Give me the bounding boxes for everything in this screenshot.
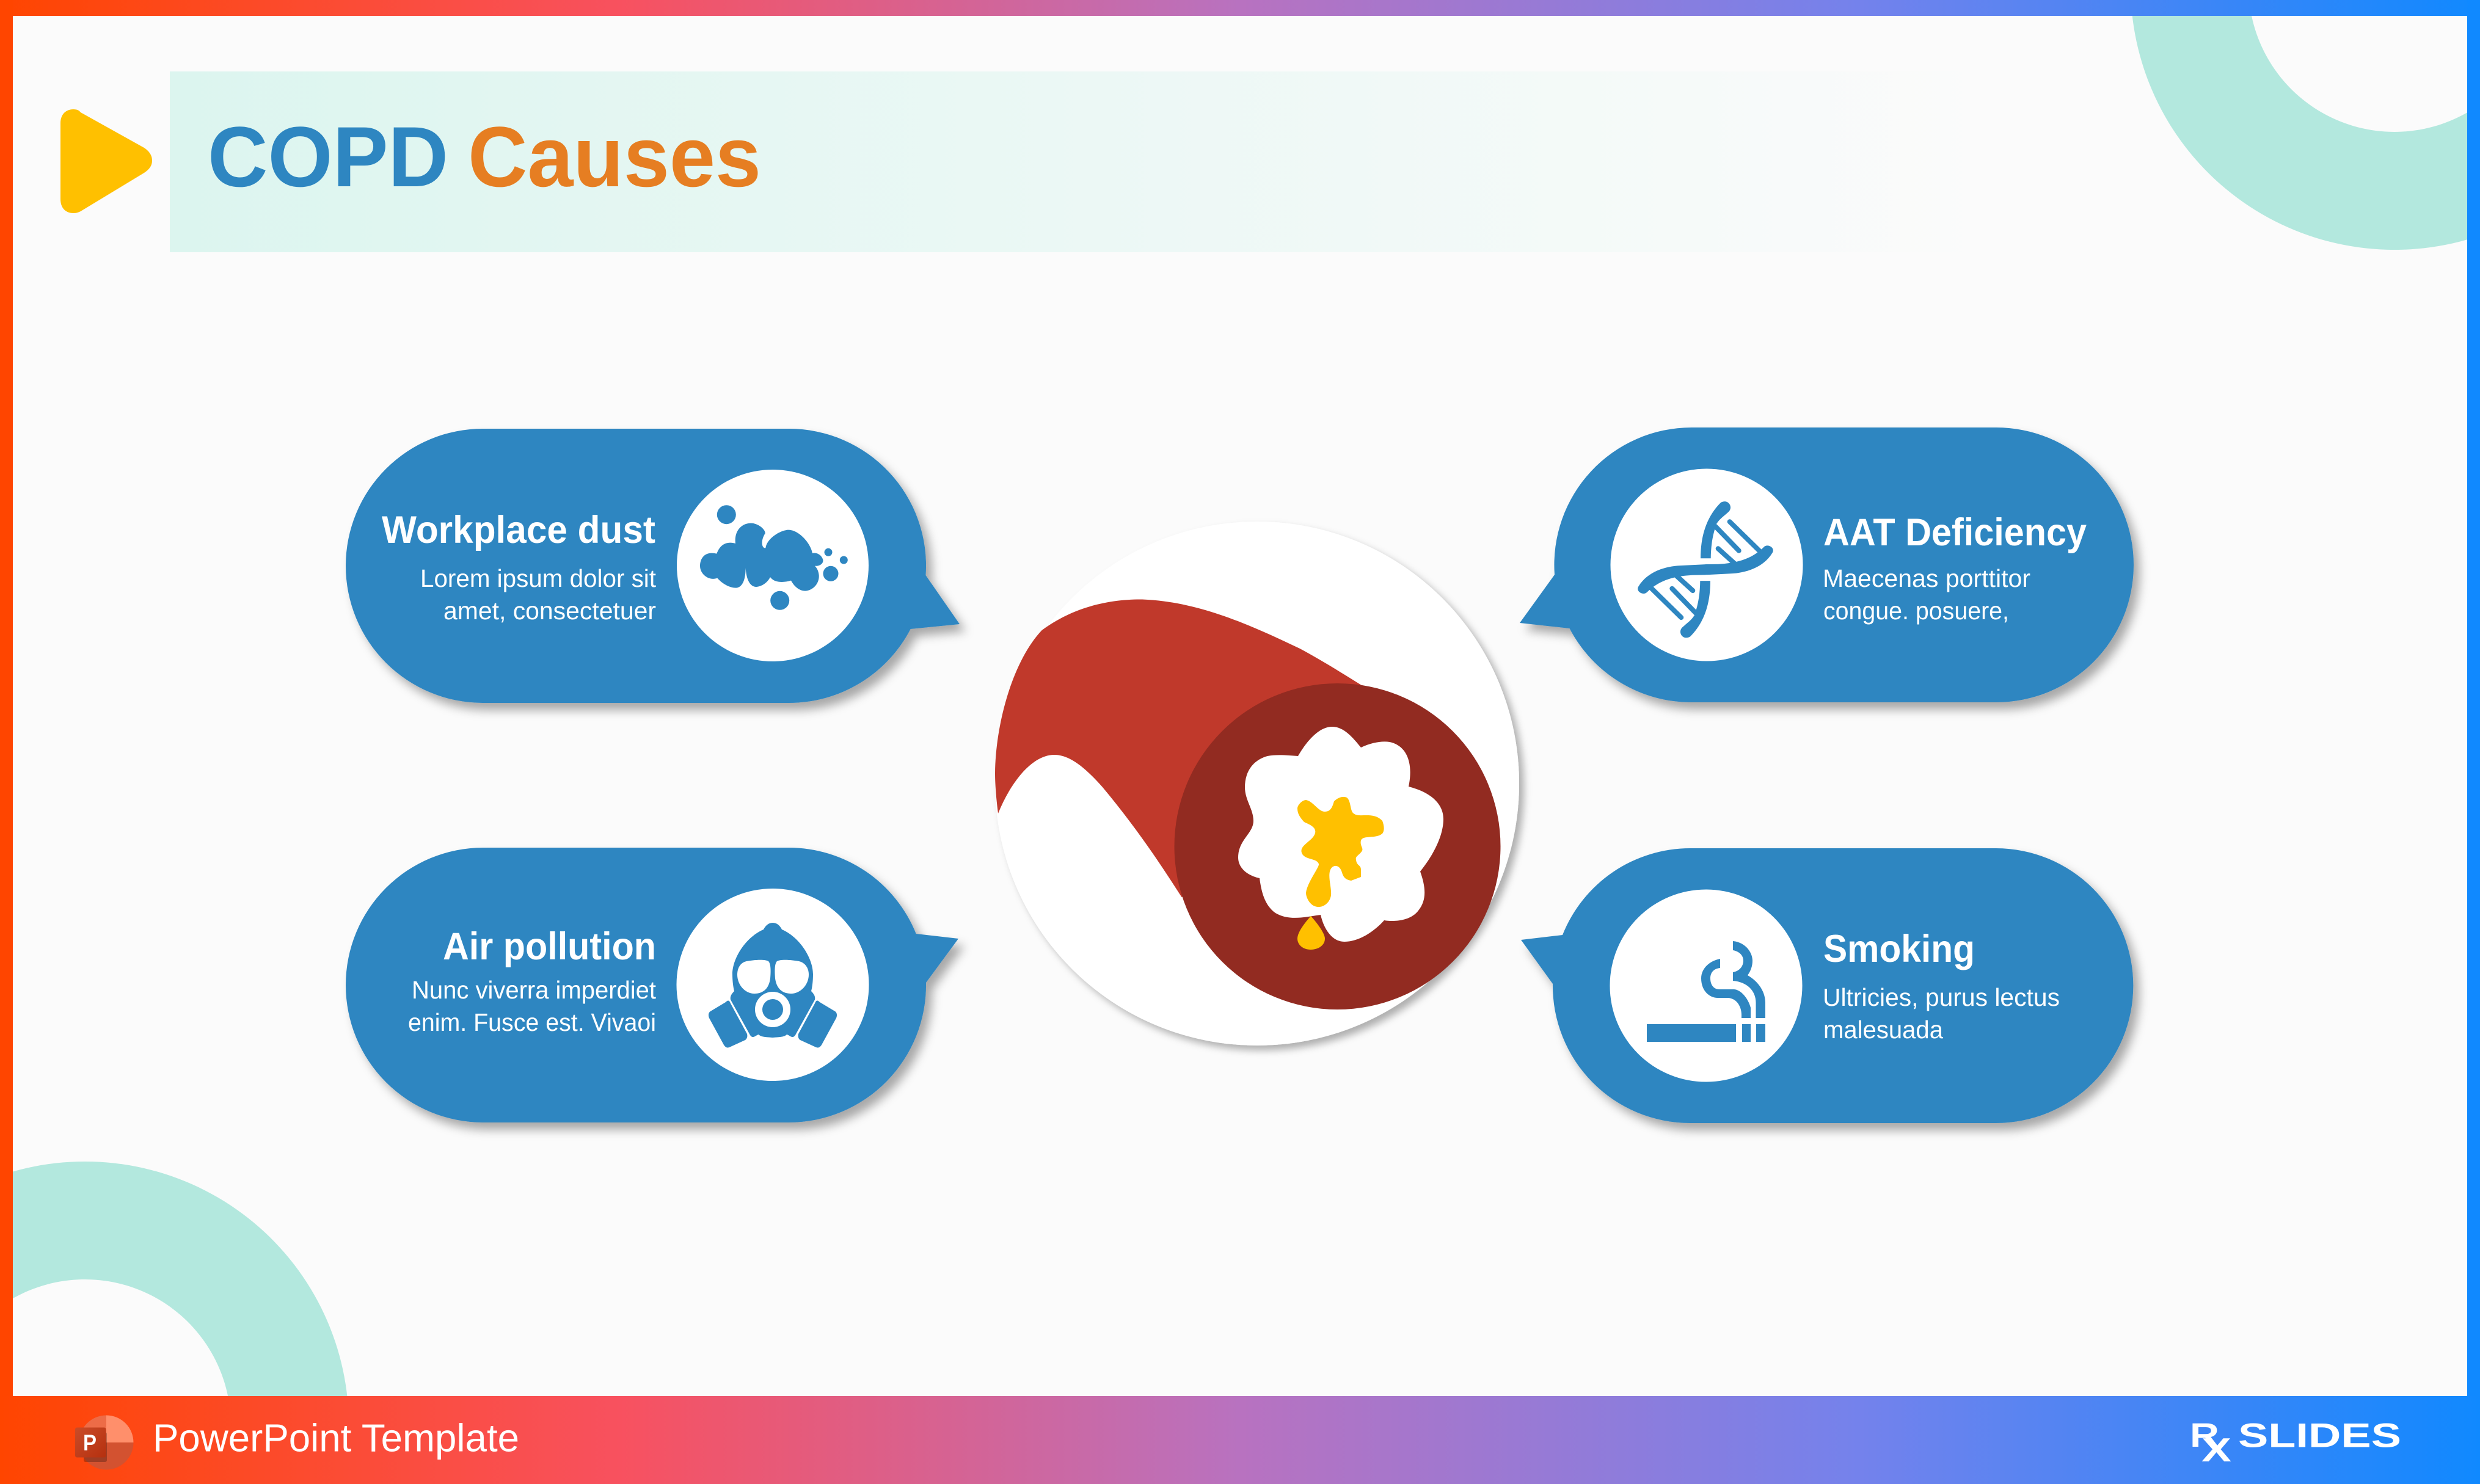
title: Causes bbox=[468, 109, 761, 205]
title banner bbox=[170, 71, 1979, 252]
panel: workplace dust bbox=[346, 429, 960, 703]
footer bar bbox=[0, 1396, 2480, 1484]
decorative ring: top right bbox=[2132, 12, 2474, 250]
airway tube bbox=[995, 599, 1362, 897]
logo: Rx Slides: SLIDES bbox=[2238, 1416, 2401, 1455]
icon: dust cloud bbox=[700, 505, 848, 610]
icon circle bbox=[677, 889, 869, 1081]
icon: cigarette bbox=[1647, 941, 1765, 1042]
speech bubble bbox=[1521, 848, 2133, 1123]
decorative ring: bottom left bbox=[6, 1162, 348, 1399]
panel: AAT deficiency bbox=[1520, 427, 2134, 702]
icon: PowerPoint logo: P bbox=[83, 1430, 97, 1455]
icon: PowerPoint logo bbox=[75, 1416, 133, 1469]
title: COPD bbox=[208, 109, 448, 205]
narrowed lumen bbox=[1238, 727, 1443, 942]
icon circle bbox=[1610, 469, 1803, 661]
white disc bbox=[995, 522, 1519, 1046]
body text: Ultricies, purus lectus bbox=[1823, 983, 2060, 1011]
icon circle bbox=[677, 470, 869, 661]
icon: gas mask bbox=[709, 923, 837, 1047]
heading: Air pollution bbox=[443, 925, 656, 968]
title bbox=[208, 109, 761, 205]
body text: malesuada bbox=[1823, 1016, 1943, 1044]
panel: smoking bbox=[1521, 848, 2133, 1123]
icon: DNA helix bbox=[1638, 501, 1773, 638]
body text: amet, consectetuer bbox=[443, 597, 656, 625]
heading: AAT Deficiency bbox=[1823, 511, 2087, 554]
heading: Smoking bbox=[1823, 928, 1975, 970]
speech bubble bbox=[346, 429, 960, 703]
panel: air pollution bbox=[346, 848, 958, 1122]
speech bubble bbox=[346, 848, 958, 1122]
airway opening bbox=[1174, 683, 1500, 1009]
body text: Lorem ipsum dolor sit bbox=[420, 564, 657, 592]
logo: Rx Slides: X bbox=[2201, 1431, 2231, 1469]
logo: Rx Slides bbox=[2190, 1416, 2401, 1469]
heading: Workplace dust bbox=[382, 509, 655, 551]
body text: congue. posuere, bbox=[1823, 597, 2009, 625]
speech bubble bbox=[1520, 427, 2134, 702]
footer label: PowerPoint Template bbox=[153, 1416, 519, 1460]
logo: Rx Slides: R bbox=[2190, 1416, 2219, 1454]
body text: enim. Fusce est. Vivaoi bbox=[408, 1008, 656, 1036]
mucus drop bbox=[1297, 916, 1325, 950]
body text: Nunc viverra imperdiet bbox=[412, 976, 657, 1004]
icon circle bbox=[1610, 889, 1802, 1082]
mucus bbox=[1297, 797, 1384, 907]
central illustration: blocked airway bbox=[995, 522, 1519, 1046]
icon: play arrow bbox=[60, 109, 152, 213]
body text: Maecenas porttitor bbox=[1823, 564, 2030, 592]
